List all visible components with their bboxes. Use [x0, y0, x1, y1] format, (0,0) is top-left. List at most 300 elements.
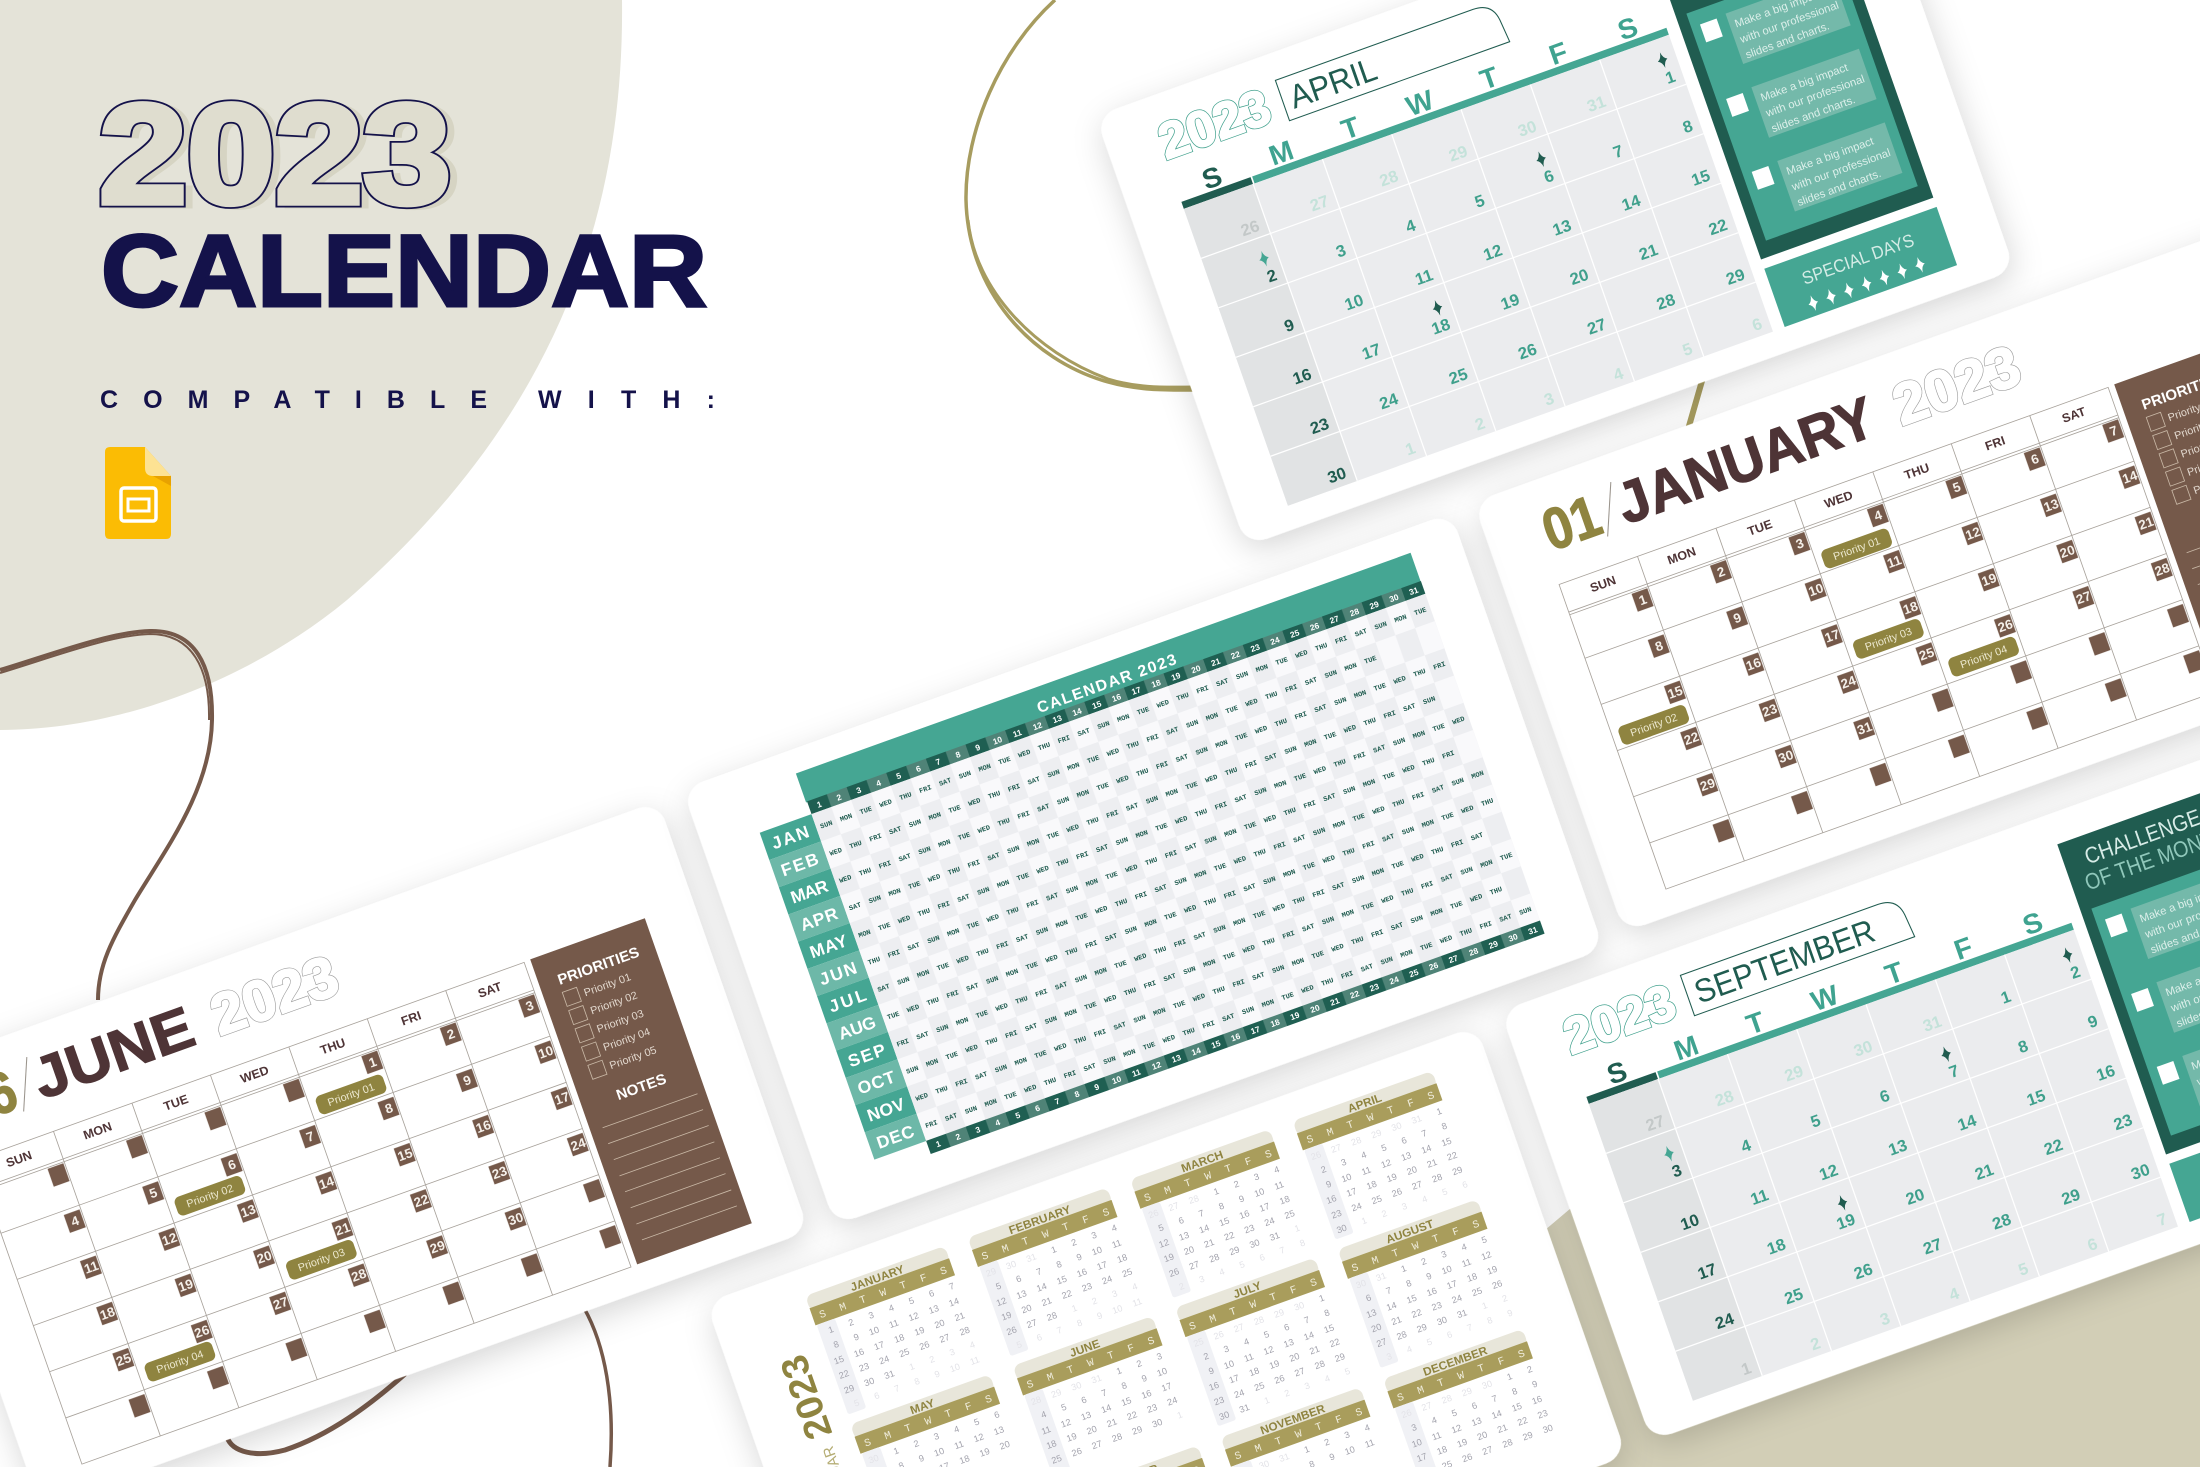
mini month: May: 30 1 2 3 4 5 6 — [867, 1409, 1001, 1465]
calendar grid: 3 — [1794, 535, 1806, 552]
planner grid — [811, 594, 1540, 1141]
calendar grid: 14 — [2120, 467, 2140, 487]
calendar grid: 30 — [2129, 1160, 2152, 1184]
priority pills: Priority 02 — [185, 1183, 235, 1210]
mini month: August: 6 7 8 9 10 11 12 — [1360, 1249, 1493, 1305]
calendar grid: 21 — [1972, 1160, 1996, 1184]
top day number strip: 4 — [875, 777, 883, 788]
top day number strip: 28 — [1348, 606, 1361, 618]
calendar grid: 18 — [1429, 315, 1453, 339]
priority pills: Priority 01 — [1832, 535, 1882, 563]
top day number strip: 27 — [1328, 613, 1341, 626]
priorities panel: Priority 04 — [602, 1026, 652, 1054]
mini month: December: S M T W T F S — [1396, 1347, 1531, 1405]
priorities panel: Priority 02 — [589, 990, 639, 1017]
calendar grid: 19 — [1834, 1210, 1858, 1234]
calendar grid: 6 — [2085, 1234, 2100, 1255]
bottom day number strip: 25 — [1408, 967, 1420, 979]
calendar grid: 7 — [1611, 141, 1626, 162]
calendar grid: 26 — [1851, 1259, 1875, 1283]
calendar grid: 3 — [1877, 1309, 1892, 1329]
mini month: January: JANUARY — [849, 1263, 906, 1294]
planner grid: FRI SAT SUN MON TUE WED THU FRI SAT SUN MON TUE WED THU FRI SAT SUN MON TUE WED THU FRI SAT SUN MON TUE WED THU FRI SAT — [896, 832, 1485, 1050]
calendar grid: 13 — [1550, 216, 1574, 240]
special days box: SPECIAL DAYS — [1799, 229, 1917, 289]
calendar grid: 8 — [383, 1100, 395, 1117]
priorities panel: Priority 05 — [608, 1044, 658, 1072]
calendar grid: 13 — [2042, 496, 2061, 515]
calendar grid: 8 — [1680, 116, 1695, 137]
bottom day number strip: 22 — [1348, 988, 1361, 1001]
calendar grid: 15 — [2024, 1086, 2048, 1110]
calendar grid: 27 — [1921, 1234, 1944, 1258]
calendar grid: THU — [1902, 461, 1931, 482]
calendar grid: 23 — [490, 1163, 509, 1182]
mini month: April: 16 17 18 19 20 21 22 — [1325, 1150, 1459, 1206]
mini month: February: FEBRUARY — [1007, 1203, 1073, 1237]
brown scribble bottom of June — [227, 1374, 405, 1454]
calendar grid: 10 — [1342, 290, 1366, 314]
calendar grid: 17 — [1695, 1259, 1719, 1283]
top day number strip: 9 — [974, 742, 982, 753]
calendar grid: 25 — [1917, 644, 1937, 664]
top day number strip: 1 — [815, 799, 823, 810]
mini month: January: 29 30 31 1 2 3 4 — [843, 1339, 976, 1396]
calendar grid: 2 — [1472, 414, 1487, 434]
calendar grid: 6 — [1877, 1086, 1892, 1107]
gold scribble — [966, 0, 1195, 390]
month title: JUNE — [24, 994, 203, 1112]
weekday header — [1172, 1, 1669, 209]
calendar grid: MON — [1666, 544, 1698, 567]
bottom day number strip: 2 — [954, 1131, 962, 1142]
calendar grid: 19 — [1498, 290, 1522, 314]
bottom day number strip — [926, 920, 1545, 1154]
mini month: June: 28 29 30 31 1 2 3 — [1030, 1351, 1163, 1407]
mini month: December: 26 27 28 29 30 1 2 — [1400, 1364, 1534, 1420]
calendar grid: 16 — [474, 1117, 493, 1136]
gold scribble fragment — [1685, 360, 1708, 440]
calendar grid: 2 — [2068, 962, 2083, 983]
top day number strip: 11 — [1011, 727, 1023, 739]
mini month: June: 11 12 13 14 15 16 17 — [1040, 1381, 1173, 1437]
planner grid: TUE WED THU FRI SAT SUN MON TUE WED THU FRI SAT SUN MON TUE WED THU FRI SAT SUN MON TUE WED THU FRI SAT SUN MON TUE WED THU — [886, 797, 1495, 1022]
bottom day number strip: 31 — [1527, 924, 1539, 937]
calendar grid: WED — [1823, 488, 1855, 511]
calendar grid: 2 — [445, 1026, 457, 1042]
mini month: July: 9 10 11 12 13 14 15 — [1202, 1322, 1335, 1378]
planner grid: WED THU FRI SAT SUN MON TUE WED THU FRI SAT SUN MON TUE WED THU FRI SAT SUN MON TUE WED THU FRI SAT SUN MON TUE — [829, 655, 1378, 859]
calendar grid: SAT — [2060, 404, 2088, 426]
title year outline: 2023 — [99, 75, 451, 234]
calendar grid: 15 — [1666, 683, 1685, 702]
calendar grid: 29 — [1446, 142, 1470, 166]
planner grid: SUN MON TUE WED THU FRI SAT SUN MON TUE WED THU FRI SAT SUN MON TUE WED THU FRI SAT SUN MON TUE WED THU FRI SAT SUN MON TUE — [905, 852, 1514, 1077]
challenge panel: with our professional — [1764, 73, 1866, 120]
top day number strip: 29 — [1368, 599, 1381, 611]
priorities panel: Priority 01 — [582, 971, 633, 999]
calendar grid: 28 — [349, 1266, 368, 1285]
bottom day number strip: 8 — [1073, 1088, 1081, 1099]
background circle — [0, 0, 622, 730]
calendar grid: 29 — [428, 1237, 447, 1257]
mini month: December: 3 4 5 6 7 8 9 — [1405, 1379, 1539, 1435]
month labels: APR — [798, 903, 841, 935]
bottom day number strip: 27 — [1447, 953, 1460, 965]
mini month: June: 18 19 20 21 22 23 24 — [1045, 1395, 1179, 1451]
bottom day number strip: 15 — [1210, 1038, 1222, 1050]
calendar grid: 11 — [1748, 1185, 1771, 1209]
calendar grid: 16 — [1744, 655, 1763, 674]
mini month: March: 26 27 28 1 2 3 4 — [1147, 1164, 1281, 1220]
calendar grid: 4 — [1403, 215, 1419, 237]
calendar grid: 17 — [1359, 340, 1383, 364]
bottom day number strip: 1 — [934, 1138, 942, 1149]
weekday header: T — [1742, 1005, 1769, 1041]
top day number strip: 23 — [1249, 641, 1262, 654]
weekday header: S — [1198, 159, 1226, 196]
weekday header: S — [1603, 1054, 1631, 1091]
mini month: July: 30 31 1 2 3 4 5 — [1218, 1366, 1352, 1422]
weekday header: T — [1476, 60, 1502, 96]
calendar grid: 5 — [2016, 1259, 2031, 1280]
calendar grid: 1 — [1663, 67, 1678, 88]
top day number strip: 30 — [1388, 592, 1400, 604]
calendar grid: 3 — [1669, 1160, 1684, 1181]
panel: September slide — [1501, 735, 2200, 1441]
calendar grid: 4 — [1611, 364, 1627, 385]
calendar grid: WED — [239, 1063, 271, 1086]
calendar grid: 22 — [1706, 215, 1730, 239]
calendar grid: 25 — [1782, 1284, 1806, 1308]
calendar grid: 24 — [1377, 389, 1401, 413]
calendar grid: 15 — [1689, 166, 1713, 190]
calendar grid: 20 — [2058, 542, 2077, 561]
calendar grid: SAT — [476, 979, 504, 1001]
calendar grid: 14 — [1955, 1110, 1980, 1135]
calendar grid: 26 — [1516, 339, 1539, 363]
special days box — [1764, 207, 1957, 327]
calendar grid: 31 — [1855, 719, 1875, 738]
calendar grid: 30 — [1851, 1037, 1875, 1061]
calendar grid — [1589, 930, 2178, 1401]
mini month: February: 5 6 7 8 9 10 11 — [1010, 1296, 1143, 1352]
calendar grid: 26 — [1996, 616, 2015, 635]
mini month: February — [968, 1187, 1149, 1357]
calendar grid: 24 — [569, 1135, 588, 1154]
mini month: January: 5 6 7 8 9 10 11 — [848, 1354, 981, 1410]
mini month: January — [805, 1246, 986, 1415]
calendar grid: 28 — [1377, 166, 1401, 190]
mini month: July: JULY — [1232, 1279, 1263, 1301]
calendar grid: 5 — [147, 1185, 160, 1201]
planner grid: SAT SUN MON TUE WED THU FRI SAT SUN MON TUE WED THU FRI SAT SUN MON TUE WED THU FRI SAT SUN MON TUE WED THU FRI SAT SUN MON — [877, 770, 1485, 995]
mini month: June: 4 5 6 7 8 9 10 — [1035, 1366, 1169, 1422]
outlined year: 2023 — [1151, 78, 1278, 170]
priorities panel — [530, 918, 752, 1264]
month labels: NOV — [864, 1094, 908, 1126]
mini month: April: 9 10 11 12 13 14 15 — [1320, 1136, 1453, 1192]
weekday header: W — [1807, 978, 1843, 1017]
top day number strip: 25 — [1289, 627, 1301, 640]
calendar grid: 6 — [2029, 451, 2041, 467]
planner header band: CALENDAR 2023 — [1035, 651, 1179, 717]
panel: year planner slide — [682, 513, 1604, 1225]
calendar grid: 31 — [1920, 1012, 1944, 1036]
panel: January slide — [1474, 226, 2200, 932]
mini month: April: 23 24 25 26 27 28 29 — [1330, 1164, 1464, 1221]
mini month: May — [850, 1374, 1032, 1467]
calendar grid: MON — [82, 1119, 114, 1142]
calendar grid: 30 — [1776, 747, 1795, 766]
outlined year: 2023 — [1556, 973, 1683, 1065]
calendar grid: 21 — [1637, 240, 1660, 264]
calendar grid: 23 — [1760, 701, 1779, 720]
calendar grid: 21 — [2137, 514, 2156, 533]
bottom day number strip: 20 — [1309, 1002, 1321, 1015]
calendar grid — [1559, 387, 2200, 889]
bottom day number strip: 21 — [1329, 995, 1341, 1008]
calendar grid: 19 — [176, 1276, 195, 1295]
priorities panel: Priority 03 — [595, 1008, 645, 1036]
bottom day number strip: 23 — [1368, 981, 1381, 994]
planner grid: SAT SUN MON TUE WED THU FRI SAT SUN MON TUE WED THU FRI SAT SUN MON TUE WED THU FRI SAT SUN MON TUE WED THU FRI SAT SUN — [848, 695, 1437, 913]
mini month: August: 27 28 29 30 31 1 2 — [1375, 1293, 1509, 1349]
title calendar: CALENDAR — [101, 214, 707, 328]
calendar grid: SUN — [1588, 573, 1618, 595]
priority pills: Priority 04 — [155, 1348, 205, 1376]
vertical year label: 2023 — [772, 1349, 840, 1445]
calendar grid: 28 — [2153, 560, 2172, 579]
mini month: November: NOVEMBER — [1259, 1402, 1327, 1437]
mini month: February: 12 13 14 15 16 17 18 — [995, 1252, 1129, 1308]
priority pills: Priority 02 — [1629, 712, 1679, 739]
planner header band — [796, 553, 1421, 803]
weekday header: T — [1337, 110, 1364, 146]
calendar grid: 26 — [1238, 216, 1262, 240]
mini month: January: 8 9 10 11 12 13 14 — [827, 1296, 960, 1352]
bottom day number strip: 5 — [1014, 1110, 1022, 1121]
month labels: MAR — [788, 876, 831, 908]
challenge panel: with our professional — [1789, 147, 1892, 194]
calendar grid: TUE — [1746, 517, 1774, 539]
calendar grid: 24 — [1713, 1309, 1737, 1333]
calendar grid: 28 — [1654, 290, 1678, 314]
calendar grid: 8 — [1653, 638, 1665, 654]
calendar grid: 11 — [1413, 265, 1435, 289]
calendar grid: 18 — [1764, 1235, 1788, 1259]
top day number strip: 10 — [991, 734, 1004, 747]
calendar grid: 30 — [506, 1209, 525, 1228]
calendar grid: 9 — [1282, 315, 1297, 336]
mini month: November — [1221, 1387, 1402, 1467]
weekday header: M — [1670, 1029, 1703, 1066]
calendar grid: 5 — [1951, 479, 1963, 496]
mini month: April: 30 1 2 3 4 5 6 — [1335, 1179, 1469, 1235]
priority pills: Priority 03 — [1864, 626, 1914, 653]
weekday header: M — [1265, 134, 1298, 171]
mini month: February: 26 27 28 1 2 3 4 — [1005, 1281, 1139, 1337]
calendar grid: 22 — [412, 1191, 431, 1210]
top day number strip: 8 — [954, 749, 962, 760]
icon: google slides — [105, 447, 171, 539]
mini month: July — [1175, 1258, 1356, 1427]
mini month: December: 10 11 12 13 14 15 16 — [1410, 1394, 1543, 1450]
priority pills — [79, 1073, 452, 1383]
outlined year: 2023 — [1885, 333, 2029, 438]
calendar grid: 1 — [367, 1054, 379, 1071]
calendar grid: 14 — [317, 1173, 336, 1192]
month labels: JAN — [769, 821, 812, 853]
calendar grid: 21 — [333, 1219, 353, 1239]
top day number strip: 6 — [915, 763, 923, 774]
bottom day number strip: 12 — [1150, 1059, 1163, 1072]
challenge panel — [1652, 0, 1933, 259]
month labels: OCT — [855, 1067, 898, 1098]
priority pills: Priority 03 — [297, 1247, 347, 1274]
calendar grid: 17 — [553, 1089, 572, 1108]
mini month: April: APRIL — [1346, 1092, 1384, 1116]
mini month: August: 3 4 5 6 7 8 9 — [1380, 1308, 1514, 1364]
calendar grid: 10 — [1678, 1210, 1702, 1234]
calendar grid: 28 — [1990, 1210, 2014, 1234]
calendar grid: 16 — [1290, 364, 1314, 388]
mini month: January: S M T W T F S — [818, 1264, 953, 1322]
calendar grid: 11 — [82, 1258, 101, 1277]
challenge panel: with our professional — [1738, 0, 1841, 46]
panel: twelve month overview slide — [706, 1026, 1627, 1467]
challenge panel: slides and charts. — [1744, 20, 1831, 61]
mini month: April: 26 27 28 29 30 31 1 — [1310, 1106, 1443, 1162]
mini month: November: S M T W T F S — [1233, 1405, 1368, 1463]
mini month: June: JUNE — [1068, 1337, 1102, 1360]
mini month: August: 13 14 15 16 17 18 19 — [1365, 1264, 1499, 1320]
calendar grid: 5 — [1808, 1111, 1823, 1132]
mini month: August — [1338, 1199, 1519, 1368]
calendar grid: 1 — [1403, 439, 1418, 459]
mini month: March: 12 13 14 15 16 17 18 — [1157, 1194, 1291, 1250]
weekday header: F — [1950, 930, 1977, 966]
calendar grid: 10 — [536, 1043, 555, 1062]
calendar grid: 16 — [2094, 1061, 2118, 1085]
mini month: July: 2 3 4 5 6 7 8 — [1197, 1307, 1331, 1364]
bottom day number strip: 30 — [1507, 931, 1519, 944]
brown scribble bottom right of June — [584, 1308, 611, 1467]
calendar grid: 6 — [226, 1157, 238, 1173]
calendar grid: 3 — [1333, 241, 1349, 262]
mini month: March: S M T W T F S — [1143, 1147, 1278, 1205]
priority pills — [1585, 499, 2020, 791]
month name box — [1275, 1, 1510, 121]
top day number strip: 3 — [855, 785, 863, 796]
calendar grid: 5 — [1680, 339, 1695, 360]
calendar grid: 7 — [304, 1128, 316, 1145]
title year inner fill: 2023 — [99, 75, 451, 234]
calendar grid: 20 — [1567, 265, 1591, 289]
bottom day number strip: 10 — [1111, 1073, 1123, 1086]
calendar grid: 22 — [1682, 729, 1701, 748]
mini month: October — [1058, 1445, 1208, 1467]
calendar grid: 27 — [1643, 1111, 1667, 1135]
calendar grid: 29 — [2059, 1185, 2083, 1209]
calendar grid: 4 — [1738, 1135, 1754, 1157]
calendar grid: 24 — [1839, 672, 1858, 692]
mini month: March: 2 3 4 5 6 7 8 — [1173, 1238, 1306, 1294]
month number: 01 — [1534, 483, 1609, 564]
calendar grid: 28 — [1712, 1086, 1736, 1110]
calendar grid — [1184, 35, 1773, 506]
background olive shape — [1500, 1192, 2200, 1467]
mini month: February: 29 30 31 1 2 3 4 — [985, 1223, 1118, 1279]
planner grid: FRI SAT SUN MON TUE WED THU FRI SAT SUN MON TUE WED THU FRI SAT SUN MON TUE WED THU FRI SAT SUN MON TUE WED THU FRI SAT SUN — [924, 906, 1533, 1131]
calendar grid: 12 — [1481, 241, 1505, 265]
outlined year: 2023 — [1885, 333, 2029, 438]
calendar grid: 22 — [2042, 1135, 2065, 1159]
weekday header: W — [1402, 83, 1438, 122]
bottom day number strip: 26 — [1428, 960, 1440, 972]
calendar grid: 27 — [1307, 191, 1331, 215]
bottom day number strip: 4 — [994, 1117, 1002, 1128]
calendar grid: 29 — [1782, 1061, 1806, 1085]
calendar grid: 13 — [239, 1201, 258, 1220]
panel: April slide — [1096, 0, 2015, 546]
top day number strip: 19 — [1170, 670, 1182, 683]
calendar grid: 7 — [2155, 1209, 2170, 1230]
month labels: DEC — [874, 1121, 917, 1153]
mini month: April — [1293, 1071, 1474, 1240]
bottom day number strip: 24 — [1388, 974, 1400, 986]
top day number strip — [807, 581, 1425, 814]
mini month: February: S M T W T F S — [980, 1205, 1115, 1264]
calendar grid: 12 — [160, 1230, 179, 1249]
challenge panel: Make a big impact — [1785, 135, 1876, 178]
title year shadow: 2023 — [107, 77, 459, 236]
calendar grid: 12 — [1817, 1160, 1840, 1184]
bottom day number strip: 28 — [1467, 945, 1480, 958]
calendar grid: 4 — [69, 1213, 82, 1229]
mini month: December: 17 18 19 20 21 22 23 — [1415, 1408, 1549, 1464]
planner grid: WED THU FRI SAT SUN MON TUE WED THU FRI SAT SUN MON TUE WED THU FRI SAT SUN MON TUE WED THU FRI SAT SUN MON TUE WED THU — [915, 886, 1504, 1104]
calendar grid: 7 — [1946, 1061, 1961, 1082]
calendar grid: 26 — [192, 1322, 211, 1341]
with label: WITH: — [538, 386, 715, 414]
priority pills: Priority 01 — [326, 1081, 376, 1109]
calendar grid: 30 — [1515, 117, 1539, 141]
calendar grid: 31 — [1585, 92, 1608, 116]
calendar grid: 7 — [2108, 423, 2120, 439]
calendar grid: 3 — [1542, 389, 1557, 410]
weekday header: T — [1881, 955, 1907, 991]
mini month: April: S M T W T F S — [1305, 1089, 1440, 1147]
top day number strip: 5 — [895, 770, 903, 781]
calendar grid: 13 — [1886, 1136, 1910, 1160]
calendar grid: 23 — [2111, 1110, 2135, 1134]
calendar grid: 29 — [1698, 775, 1717, 794]
calendar grid: 27 — [2074, 588, 2093, 607]
calendar grid: 8 — [2016, 1036, 2031, 1057]
top day number strip: 26 — [1308, 620, 1321, 633]
bottom day number strip: 6 — [1034, 1103, 1042, 1114]
mini month: May: MAY — [909, 1397, 937, 1417]
calendar grid — [0, 962, 631, 1464]
weekday header: F — [1545, 35, 1572, 71]
calendar grid: 19 — [1980, 570, 1999, 589]
mini month: December — [1383, 1329, 1564, 1467]
calendar grid: 2 — [1715, 564, 1727, 580]
calendar grid: FRI — [1983, 433, 2007, 453]
calendar grid: SUN — [4, 1148, 34, 1170]
calendar grid: 25 — [114, 1350, 134, 1369]
